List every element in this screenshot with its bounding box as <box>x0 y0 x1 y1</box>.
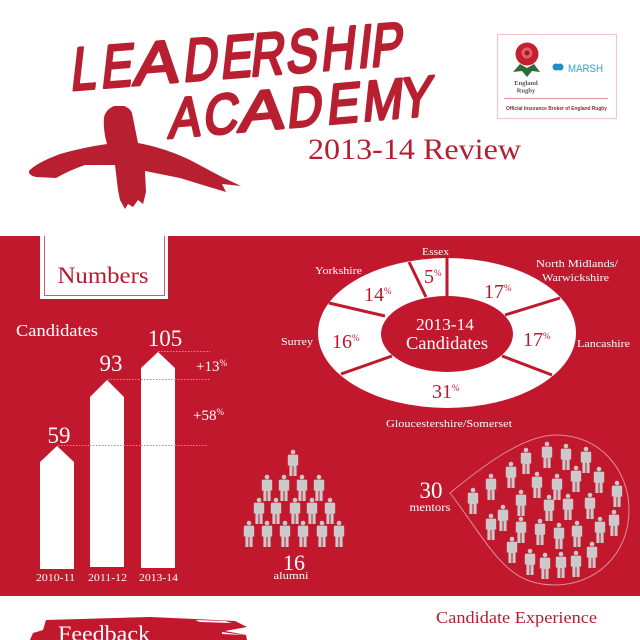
percentages: 17 <box>523 329 543 351</box>
icon: England rose <box>513 42 540 77</box>
region labels <box>281 246 630 430</box>
title: Leadership Academy: LE <box>68 31 138 104</box>
region labels: Yorkshire <box>315 265 362 277</box>
England Rugby wordmark <box>514 80 538 94</box>
bar values <box>48 326 182 448</box>
England Rugby wordmark: Rugby <box>517 88 536 94</box>
heading tab: Numbers <box>40 236 168 299</box>
year labels: 2011-12 <box>88 573 127 584</box>
bar chart: candidates <box>16 321 227 584</box>
bar values: 105 <box>148 326 182 351</box>
year labels: 2010-11 <box>36 573 75 584</box>
teardrop outline <box>450 435 629 585</box>
region labels: Lancashire <box>577 338 630 350</box>
bar values: 93 <box>100 351 122 376</box>
region labels: Warwickshire <box>542 272 609 284</box>
ring chart: 2013-14 candidates by region <box>281 246 630 430</box>
year labels: 2013-14 <box>139 573 179 584</box>
title: Leadership Academy <box>68 10 436 151</box>
ring centre label: Candidates <box>406 333 488 353</box>
icon: brush-stroke cross <box>29 106 241 209</box>
year labels <box>36 573 179 584</box>
logo box: England Rugby and Marsh <box>498 34 616 118</box>
heading: Feedback brush banner <box>30 617 247 640</box>
Marsh wordmark: MARSH <box>568 63 603 75</box>
ring centre label: 2013-14 <box>416 315 475 334</box>
percentages: % <box>352 333 360 343</box>
percentages <box>332 266 551 403</box>
change labels <box>193 358 227 424</box>
alumni count: 16 <box>283 550 305 575</box>
pictogram: 30 mentors <box>410 435 629 585</box>
mentors count: mentors <box>410 502 451 514</box>
heading: Candidate Experience: Candidate Experience <box>436 608 597 627</box>
region labels: Gloucestershire/Somerset <box>386 418 512 430</box>
bar values: 59 <box>48 423 70 448</box>
percentages: % <box>384 286 392 296</box>
mentors count: 30 <box>420 478 442 503</box>
percentages: % <box>504 283 512 293</box>
people pyramid <box>244 450 344 547</box>
percentages: 31 <box>432 381 452 403</box>
change labels: % <box>216 407 224 417</box>
title: Leadership Academy: DEMY <box>285 64 436 141</box>
icon: Marsh mark <box>552 64 564 70</box>
pictogram: 16 alumni <box>244 450 344 582</box>
percentages: % <box>543 331 551 341</box>
percentages: 5 <box>424 266 434 288</box>
change labels: +58 <box>193 408 216 424</box>
reference lines <box>58 352 211 446</box>
mentors count <box>410 478 451 514</box>
region labels: Surrey <box>281 336 314 348</box>
ring centre label <box>406 315 488 353</box>
panel: numbers <box>0 236 640 596</box>
percentages: 17 <box>484 281 504 303</box>
title: Leadership Academy: A <box>131 27 184 99</box>
header: title and logos <box>29 10 616 209</box>
region labels: Essex <box>422 246 450 258</box>
change labels: % <box>219 358 227 368</box>
title: Leadership Academy: A <box>236 77 288 145</box>
region labels: North Midlands/ <box>536 258 619 270</box>
change labels: +13 <box>196 359 219 375</box>
percentages: 14 <box>364 284 384 306</box>
percentages: % <box>452 383 460 393</box>
people cluster <box>468 442 622 579</box>
broker line: Official Insurance Broker of England Rugby <box>506 106 607 112</box>
title: Leadership Academy: AC <box>167 81 242 151</box>
bars <box>40 352 175 569</box>
title: Leadership Academy: DERSHIP <box>181 10 407 95</box>
percentages: % <box>434 268 442 278</box>
alumni count <box>274 550 308 582</box>
chart heading: Candidates <box>16 321 98 340</box>
percentages: 16 <box>332 331 352 353</box>
heading tab: Numbers: Numbers <box>58 263 149 288</box>
England Rugby wordmark: England <box>514 80 538 87</box>
alumni count: alumni <box>274 570 308 582</box>
subtitle: 2013-14 Review: 2013-14 Review <box>308 133 521 166</box>
